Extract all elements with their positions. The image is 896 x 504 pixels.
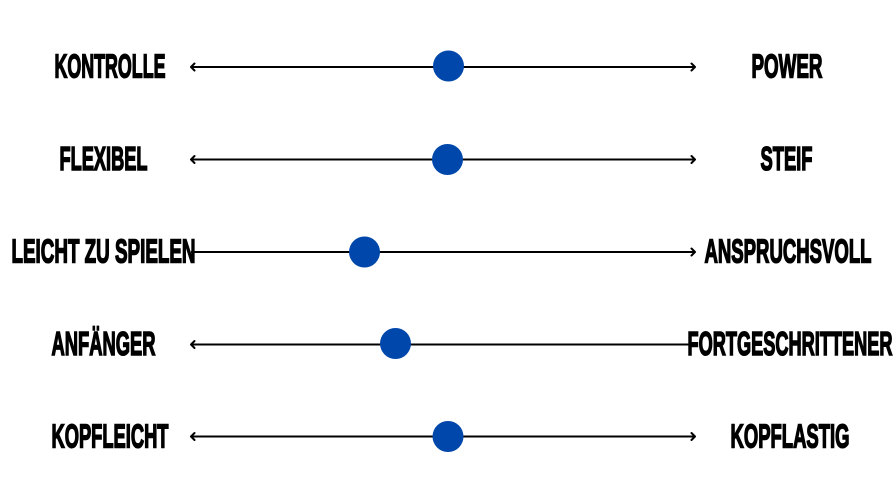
double arrow xyxy=(191,433,695,440)
marker xyxy=(349,236,380,268)
row: Kontrolle to Power xyxy=(54,48,822,86)
double arrow xyxy=(191,64,695,70)
row: Kopfleicht to Kopflastig xyxy=(52,418,850,456)
marker xyxy=(432,144,463,175)
double arrow xyxy=(191,248,695,256)
marker xyxy=(433,50,464,82)
marker xyxy=(432,421,464,452)
label: Steif: STEIF xyxy=(760,141,812,178)
label: Kopfleicht: KOPFLEICHT xyxy=(52,418,169,456)
label: Anfänger: ANFÄNGER xyxy=(52,326,156,363)
double arrow xyxy=(191,156,695,163)
label: Power: POWER xyxy=(752,48,822,86)
double arrow xyxy=(191,341,694,348)
marker xyxy=(380,328,411,359)
row: Anfänger to Fortgeschrittener xyxy=(52,326,892,363)
label: Leicht zu spielen: LEICHT ZU SPIELEN xyxy=(12,234,196,270)
label: Flexibel: FLEXIBEL xyxy=(60,141,148,178)
label: Kontrolle: KONTROLLE xyxy=(54,48,166,86)
row: Flexibel to Steif xyxy=(60,141,812,178)
row: Leicht zu spielen to Anspruchsvoll xyxy=(12,234,872,270)
